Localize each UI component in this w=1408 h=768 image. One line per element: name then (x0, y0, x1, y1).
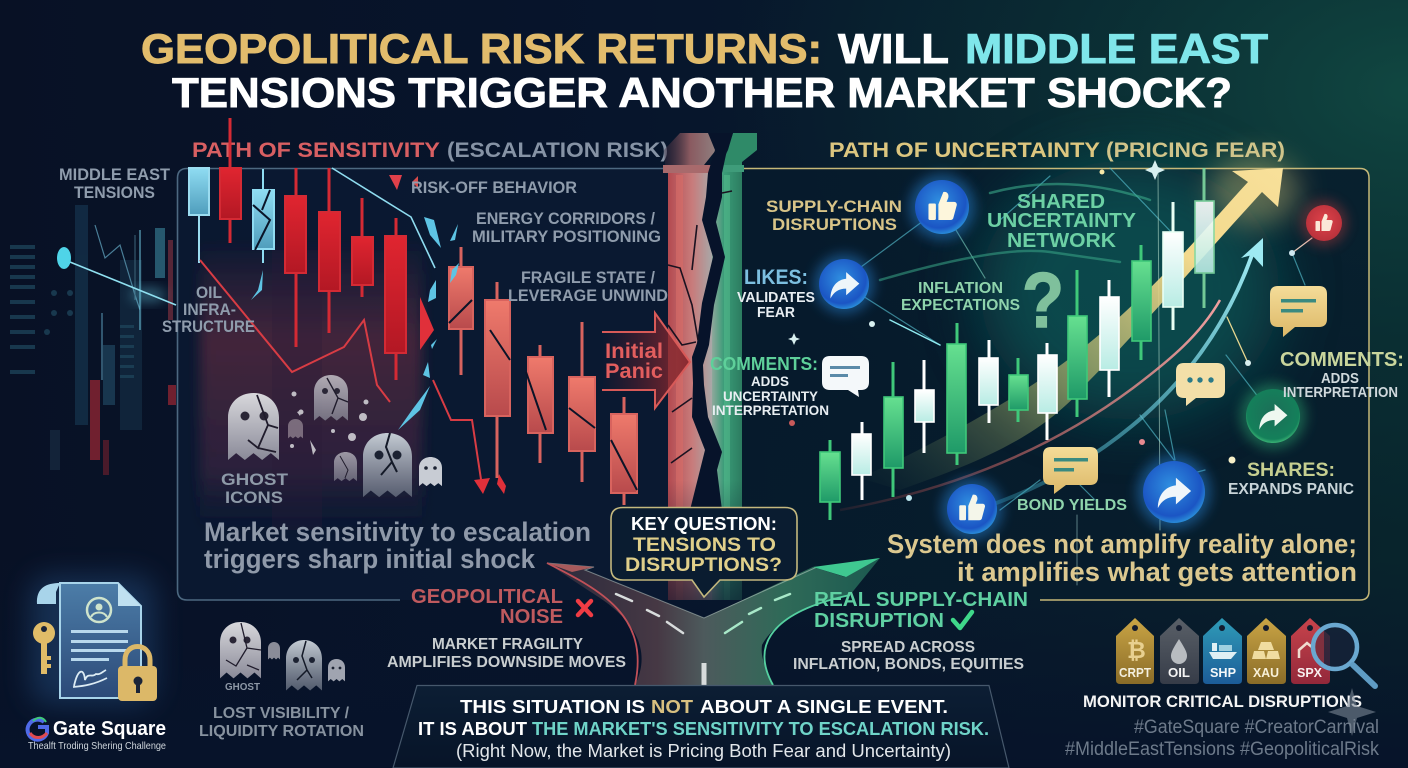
icon: comment bubble gold bottom (1043, 447, 1098, 494)
network nodes and sparkles (788, 160, 1295, 501)
title: will: WILL (838, 25, 949, 72)
text: market fragility: MARKET FRAGILITY (432, 636, 583, 653)
label: oil infrastructure (162, 283, 255, 336)
icon: thumb red (1301, 200, 1347, 246)
label: ghost icons: GHOST (221, 470, 289, 489)
label: inflation expectations (901, 280, 1020, 314)
text: market fragility: AMPLIFIES DOWNSIDE MOVES (387, 654, 626, 671)
road: right fork (704, 558, 880, 685)
label: likes validates fear: VALIDATES (737, 290, 815, 306)
hashtags (1065, 717, 1379, 760)
label: middle east tensions (59, 165, 171, 202)
banner line 2: IT IS ABOUT (418, 719, 527, 739)
label: energy corridors: MILITARY POSITIONING (472, 227, 661, 246)
road: left fork (547, 563, 704, 685)
label: shared uncertainty network: NETWORK (1007, 230, 1117, 252)
label: fragile state (508, 268, 668, 305)
logo: gate square (28, 718, 166, 752)
label: lost visibility (199, 705, 364, 740)
falling price line and shards (200, 168, 506, 494)
candlestick chart: red falling candles (189, 118, 637, 505)
tag: crypto: CRPT (1119, 666, 1151, 680)
callout: key question: TENSIONS TO (633, 534, 776, 556)
line: pink trend (840, 300, 1220, 510)
label: comments adds interpretation: COMMENTS: (1280, 349, 1404, 371)
debris (290, 392, 368, 455)
tag: gold (1247, 618, 1286, 684)
panel: path of sensitivity (177, 168, 677, 600)
label: oil infrastructure: OIL (196, 283, 222, 302)
label: lost visibility: LIQUIDITY ROTATION (199, 723, 364, 740)
label: comments adds uncertainty: ADDS (751, 373, 789, 389)
label: comments adds uncertainty: INTERPRETATION (712, 402, 829, 418)
heading: path of uncertainty: (PRICING FEAR) (1106, 139, 1285, 162)
banner line 3: (Right Now, the Market is Pricing Both Fear and Uncertainty) (456, 741, 951, 761)
label: inflation expectations: INFLATION (918, 280, 1003, 297)
label: shared uncertainty network: UNCERTAINTY (987, 210, 1137, 232)
text: market sensitivity: Market sensitivity to escalation (204, 517, 591, 547)
label: bond yields: BOND YIELDS (1017, 497, 1127, 514)
icon: dots bubble (1176, 363, 1225, 406)
icon: padlock (118, 646, 157, 701)
candlestick chart: green rising candles (820, 168, 1214, 520)
label: middle east tensions: TENSIONS (74, 183, 155, 202)
arrow: blue rising (960, 238, 1263, 515)
callout: key question (611, 508, 797, 597)
label: comments adds uncertainty: UNCERTAINTY (723, 388, 819, 404)
arrow: initial panic: Panic (605, 360, 663, 383)
asset tags (1116, 618, 1330, 684)
icon: ghost cracked top (314, 375, 348, 421)
diverging road (547, 558, 880, 685)
title (141, 25, 1268, 116)
ghost cluster: lost visibility: GHOST (225, 682, 260, 693)
labels: left panel drivers (59, 165, 668, 336)
icon: share green (1240, 383, 1306, 449)
label: supply-chain disruptions: DISRUPTIONS (772, 215, 897, 234)
tag: oil (1160, 618, 1199, 684)
label: comments adds interpretation: ADDS (1321, 371, 1359, 387)
label: likes validates fear (737, 266, 815, 321)
text: spread across (793, 639, 1024, 673)
label: energy corridors (472, 209, 661, 246)
tag: shipping (1203, 618, 1242, 684)
title: first line gold part: GEOPOLITICAL RISK RETURNS: (141, 25, 822, 72)
label: risk-off behavior: RISK-OFF BEHAVIOR (411, 178, 577, 197)
callout: key question: DISRUPTIONS? (625, 554, 782, 576)
banner line 1: THIS SITUATION IS (460, 697, 645, 717)
icon: share blue left (814, 254, 874, 314)
label: lost visibility: LOST VISIBILITY / (213, 705, 350, 722)
text: market fragility (387, 636, 626, 671)
ghost cluster: lost visibility (220, 622, 345, 693)
label: comments adds uncertainty (710, 354, 829, 418)
label: inflation expectations: EXPECTATIONS (901, 297, 1020, 314)
decorative star (1328, 688, 1376, 736)
banner: bottom statement (393, 686, 1009, 768)
icon: ghost cracked large (228, 393, 279, 460)
text: system does not amplify: System does not amplify reality alone; (887, 529, 1357, 559)
ghost icons (228, 375, 442, 497)
icon: ghost small (288, 419, 303, 438)
text: market sensitivity (204, 517, 591, 574)
logo: gate square: Thealft Troding Shering Challenge (28, 740, 166, 752)
label: middle east tensions: MIDDLE EAST (59, 165, 171, 184)
label: shared uncertainty network: SHARED (1017, 191, 1105, 213)
tag: crypto: ₿ (1127, 637, 1146, 663)
tag: oil: OIL (1168, 666, 1190, 680)
label: ghost icons: ICONS (225, 488, 283, 507)
label: supply-chain disruptions: SUPPLY-CHAIN (766, 197, 902, 216)
arrow: gold rising (860, 168, 1283, 490)
icon: thumb blue bottom (941, 478, 1003, 540)
label: likes validates fear: LIKES: (744, 266, 808, 289)
icon: ghost middle (334, 452, 357, 481)
heading: path of sensitivity: PATH OF SENSITIVITY (192, 139, 440, 162)
text: spread across: INFLATION, BONDS, EQUITIES (793, 656, 1024, 673)
label: geopolitical noise (411, 586, 591, 628)
label: likes validates fear: FEAR (757, 305, 795, 321)
label: geopolitical noise: GEOPOLITICAL (411, 586, 563, 608)
text: system does not amplify (887, 529, 1357, 587)
label: real supply-chain disruption (814, 589, 1028, 632)
text: system does not amplify: it amplifies what gets attention (957, 557, 1357, 587)
tag: spx: SPX (1297, 666, 1323, 680)
arrow: initial panic (602, 313, 690, 408)
network lines: right panel (838, 168, 1312, 585)
label: shares expands panic (1228, 460, 1354, 498)
tag: shipping: SHP (1210, 666, 1236, 680)
panel: path of uncertainty (740, 155, 1369, 600)
icon: ghost sad (363, 433, 412, 497)
hashtags: #GateSquare #CreatorCarnival (1134, 717, 1379, 738)
banner line 1: NOT (651, 697, 693, 717)
label: supply-chain disruptions (766, 197, 902, 234)
text: spread across: SPREAD ACROSS (841, 639, 975, 656)
label: comments adds interpretation: INTERPRETATION (1283, 385, 1398, 401)
label: geopolitical noise: NOISE (500, 606, 563, 628)
tag: crypto (1116, 618, 1154, 684)
label: fragile state: FRAGILE STATE / (521, 268, 655, 287)
icon: magnifying glass (1313, 625, 1375, 686)
cracked central column (663, 133, 757, 600)
label: real supply-chain disruption: DISRUPTION (814, 610, 944, 632)
label: oil infrastructure: INFRA- (183, 300, 236, 319)
banner line 1 (460, 697, 948, 717)
logo: gate square: Gate Square (53, 718, 166, 740)
banner line 2: THE MARKET'S SENSITIVITY TO ESCALATION RISK. (532, 719, 989, 739)
label: energy corridors: ENERGY CORRIDORS / (476, 209, 655, 228)
label: shared uncertainty network (987, 191, 1137, 252)
icon: ghost tiny (419, 457, 442, 486)
heading: path of uncertainty: PATH OF UNCERTAINTY (829, 139, 1100, 162)
text: market sensitivity: triggers sharp initial shock (204, 544, 536, 574)
icon: thumb blue top (909, 174, 975, 240)
tag: gold: XAU (1253, 666, 1279, 680)
arrow: initial panic: Initial (605, 340, 663, 363)
label: real supply-chain disruption: REAL SUPPLY-CHAIN (814, 589, 1028, 611)
heading: path of uncertainty (829, 139, 1285, 162)
title: second line: TENSIONS TRIGGER ANOTHER MARKET SHOCK? (172, 69, 1232, 116)
left backdrop: data screens and glowing beam (10, 205, 176, 475)
heading: monitor critical disruptions: MONITOR CRITICAL DISRUPTIONS (1083, 692, 1362, 711)
icon: share blue bottom (1137, 455, 1211, 529)
heading: path of sensitivity (192, 139, 668, 162)
icon: red x (578, 601, 591, 615)
labels: right panel (710, 191, 1404, 514)
label: shares expands panic: SHARES: (1247, 460, 1335, 481)
icon: question mark: ? (1022, 256, 1064, 344)
heading: path of sensitivity: (ESCALATION RISK) (447, 139, 668, 162)
tag: spx (1291, 618, 1330, 684)
icon: comment bubble gold large (1270, 286, 1327, 337)
icon: key (33, 622, 55, 674)
title: middle east: MIDDLE EAST (965, 25, 1268, 72)
label: comments adds interpretation (1280, 349, 1404, 401)
label: fragile state: LEVERAGE UNWIND (508, 286, 668, 305)
callout: key question: KEY QUESTION: (631, 514, 777, 534)
hashtags: #MiddleEastTensions #GeopoliticalRisk (1065, 739, 1379, 760)
icon: green check (953, 612, 972, 628)
label: comments adds uncertainty: COMMENTS: (710, 354, 818, 374)
icon: document with key and lock (30, 575, 157, 705)
label: shares expands panic: EXPANDS PANIC (1228, 481, 1354, 498)
label: ghost icons (221, 470, 289, 507)
label: oil infrastructure: STRUCTURE (162, 317, 255, 336)
banner line 1: ABOUT A SINGLE EVENT. (700, 697, 948, 717)
icon: comment bubble white (822, 356, 869, 397)
big rising arrows (840, 168, 1283, 515)
